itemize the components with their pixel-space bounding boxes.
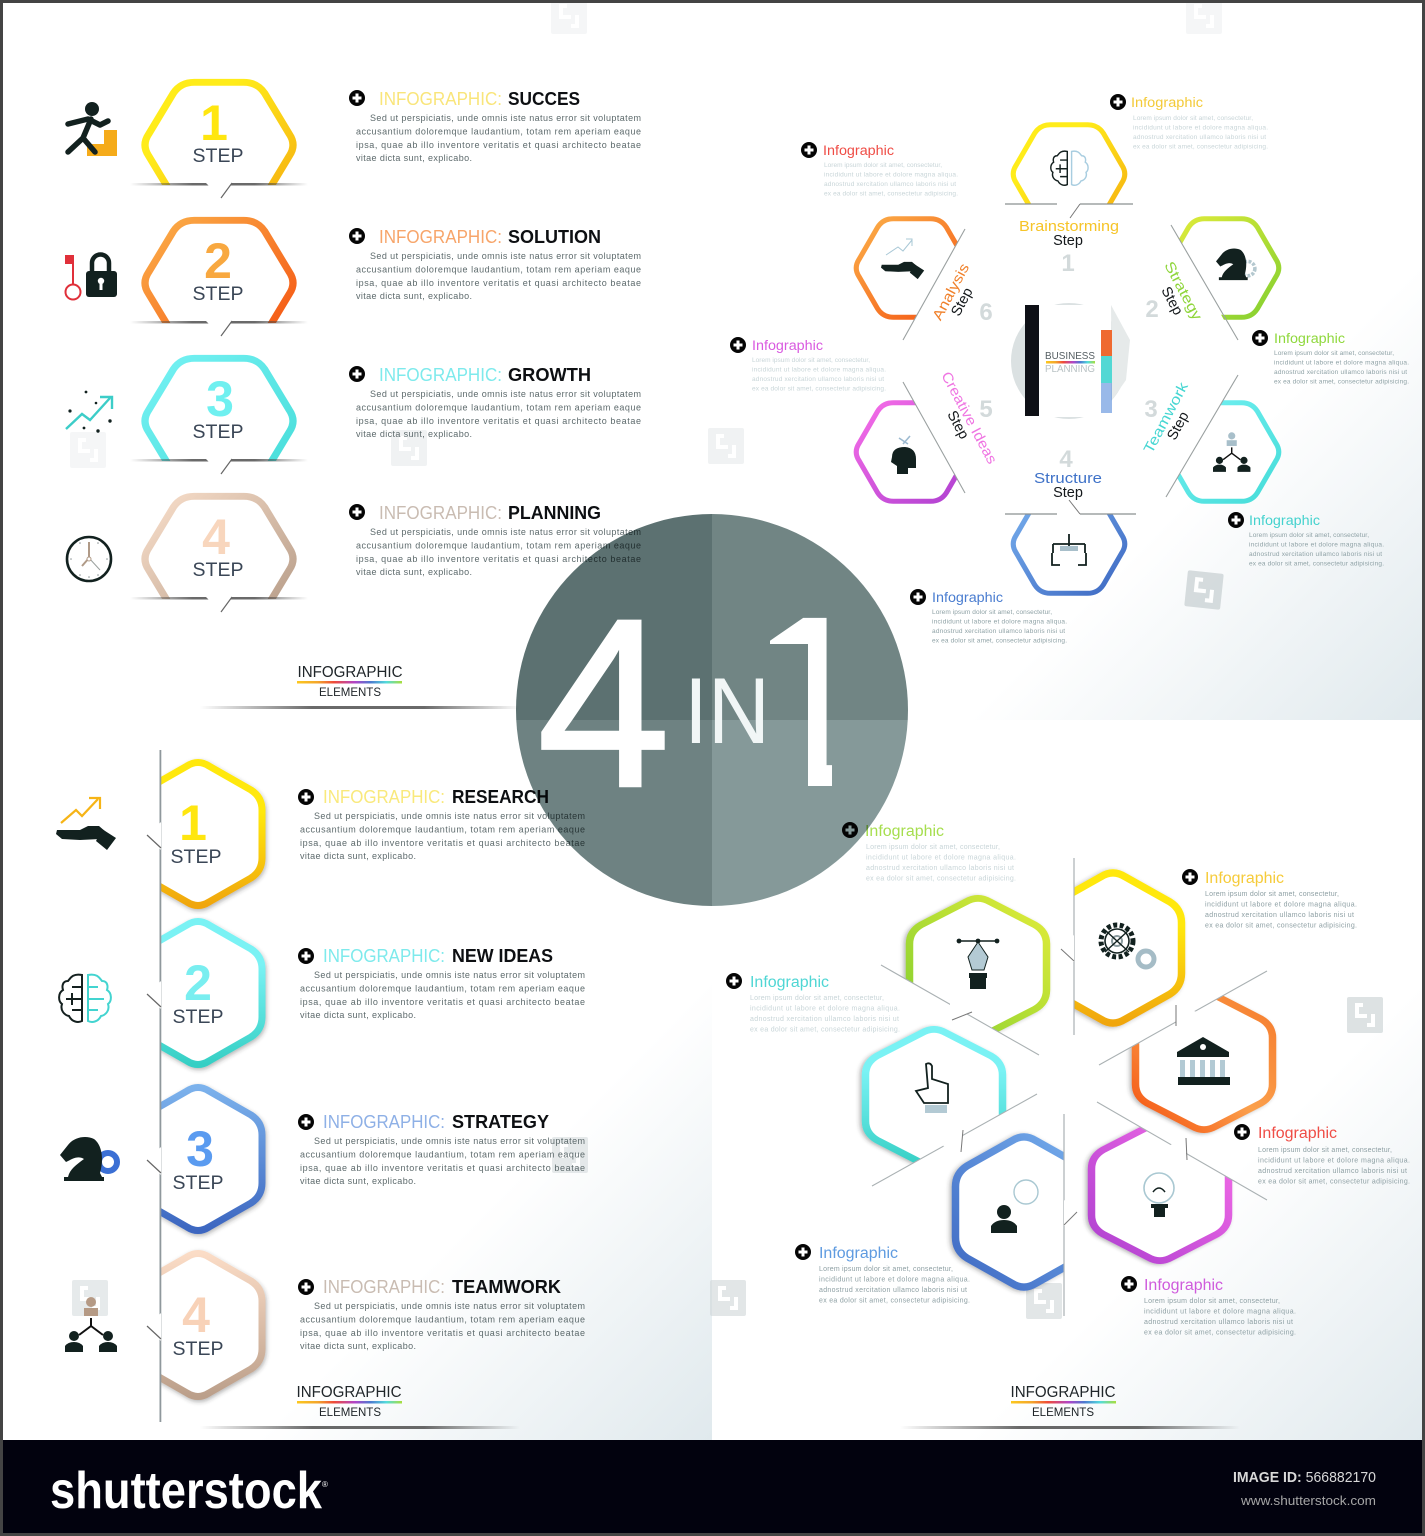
step 2 solution xyxy=(130,220,310,353)
callout: magenta: incididunt ut labore et dolore magna aliqua. xyxy=(752,366,886,374)
callout: blue xyxy=(795,1244,970,1304)
callout: green: Infographic xyxy=(1274,331,1345,346)
callout: blue: Infographic xyxy=(932,590,1003,605)
text block: growth: vitae dicta sunt, explicabo. xyxy=(356,429,472,439)
text block: strategy: vitae dicta sunt, explicabo. xyxy=(300,1176,416,1186)
callout: yellow: incididunt ut labore et dolore magna aliqua. xyxy=(1205,902,1357,908)
hexagon: teamwork xyxy=(1167,403,1279,501)
text block: growth: accusantium doloremque laudantium, totam rem aperiam eaque xyxy=(356,402,641,412)
text block: research: ipsa, quae ab illo inventore veritatis et quasi architecto beatae xyxy=(300,838,585,848)
callout: red: incididunt ut labore et dolore magna aliqua. xyxy=(824,172,958,178)
text block: research: INFOGRAPHIC: xyxy=(323,787,445,807)
icon: team hierarchy xyxy=(1213,432,1250,472)
text block: strategy: STRATEGY xyxy=(452,1112,549,1132)
callout: blue: incididunt ut labore et dolore magna aliqua. xyxy=(819,1276,970,1284)
hexagon: strategy xyxy=(1167,219,1279,317)
callout: blue: incididunt ut labore et dolore magna aliqua. xyxy=(932,618,1067,626)
label: brainstorming step: Step xyxy=(1053,233,1083,249)
step 3 growth: 3 xyxy=(206,371,234,427)
label: brainstorming step: 1 xyxy=(1061,250,1075,277)
callout: cyan: adnostrud xercitation ullamco laboris nisi ut xyxy=(1249,551,1382,558)
callout: cyan: ex ea dolor sit amet, consectetur adipisicing. xyxy=(1249,560,1384,568)
brand wordmark: shutterstock xyxy=(50,1462,322,1520)
label: creative ideas step: Step xyxy=(943,408,972,442)
center book on circle: PLANNING xyxy=(1045,363,1095,375)
hexagon: green pen xyxy=(910,898,1046,1036)
website: www.shutterstock.com xyxy=(1240,1493,1376,1508)
text block: solution: INFOGRAPHIC: xyxy=(379,227,502,247)
text block: succes: accusantium doloremque laudantium, totam rem aperiam eaque xyxy=(356,126,641,136)
callout: red: Infographic xyxy=(1258,1125,1337,1142)
label: brainstorming step: Brainstorming xyxy=(1019,219,1119,235)
callout: cyan xyxy=(726,973,900,1034)
label: structure step: Structure xyxy=(1034,471,1102,487)
callout: yellow: Infographic xyxy=(1205,870,1284,887)
step 4 planning: 4 xyxy=(202,509,230,565)
step 1 success xyxy=(130,82,310,215)
step 1 success: STEP xyxy=(193,145,243,167)
text block: solution xyxy=(349,227,641,301)
hexagon: structure xyxy=(1013,495,1125,593)
callout: yellow xyxy=(1110,94,1268,150)
callout: magenta: Lorem ipsum dolor sit amet, consectetur, xyxy=(1144,1298,1280,1305)
text block: planning: vitae dicta sunt, explicabo. xyxy=(356,567,472,577)
central 4 in 1 badge: IN xyxy=(684,658,770,763)
callout: blue: ex ea dolor sit amet, consectetur adipisicing. xyxy=(932,638,1067,644)
logo: infographic elements bottom-left: INFOGRAPHIC xyxy=(296,1384,402,1401)
callout: magenta xyxy=(730,337,886,392)
callout: blue: Infographic xyxy=(819,1245,898,1262)
callout: blue: adnostrud xercitation ullamco laboris nisi ut xyxy=(932,628,1065,635)
callout: yellow: adnostrud xercitation ullamco laboris nisi ut xyxy=(1133,134,1266,141)
text block: growth xyxy=(349,365,641,439)
callout: cyan: Infographic xyxy=(750,974,829,991)
callout: yellow: Lorem ipsum dolor sit amet, consectetur, xyxy=(1205,891,1339,898)
icon: clock xyxy=(67,537,111,581)
logo: infographic elements top-left: INFOGRAPHIC xyxy=(298,664,402,681)
text block: planning: INFOGRAPHIC: xyxy=(379,503,502,523)
text block: teamwork: ipsa, quae ab illo inventore veritatis et quasi architecto beatae xyxy=(300,1328,585,1338)
logo: infographic elements top-left: ELEMENTS xyxy=(319,685,381,699)
text block: strategy: ipsa, quae ab illo inventore veritatis et quasi architecto beatae xyxy=(300,1163,585,1173)
step 2 solution: STEP xyxy=(193,283,243,305)
text block: new ideas: vitae dicta sunt, explicabo. xyxy=(300,1010,416,1020)
text block: research: accusantium doloremque laudantium, totam rem aperiam eaque xyxy=(300,824,585,834)
label: structure step: 4 xyxy=(1059,446,1073,473)
label: teamwork step: Step xyxy=(1164,409,1193,443)
logo: infographic elements bottom-left: ELEMENTS xyxy=(319,1405,381,1419)
text block: strategy: Sed ut perspiciatis, unde omnis iste natus error sit voluptatem xyxy=(314,1136,585,1146)
text block: research xyxy=(298,787,585,861)
icon: light bulb xyxy=(1144,1173,1174,1217)
callout: green xyxy=(842,822,1016,882)
text block: planning: Sed ut perspiciatis, unde omnis iste natus error sit voluptatem xyxy=(370,527,641,537)
hexagon: orange bank xyxy=(1136,992,1272,1130)
icon: brain xyxy=(1051,151,1088,185)
fold lines and pointers xyxy=(872,858,1267,1316)
step 1 label: 1 xyxy=(179,795,207,851)
label: strategy step: 2 xyxy=(1145,296,1159,323)
icon: team hierarchy xyxy=(65,1297,117,1352)
panel: bottom-left vertical steps xyxy=(56,750,585,1430)
callout: yellow: ex ea dolor sit amet, consectetur adipisicing. xyxy=(1133,144,1268,150)
callout: yellow: ex ea dolor sit amet, consectetur adipisicing. xyxy=(1205,922,1357,930)
label: structure step xyxy=(1034,446,1102,501)
text block: new ideas xyxy=(298,946,585,1020)
text block: succes: INFOGRAPHIC: xyxy=(379,89,502,109)
hexagon: yellow gear xyxy=(1074,868,1186,1030)
callout: blue xyxy=(910,589,1067,644)
text block: growth: Sed ut perspiciatis, unde omnis iste natus error sit voluptatem xyxy=(370,389,641,399)
callout: magenta: ex ea dolor sit amet, consectetur adipisicing. xyxy=(752,386,886,392)
callout: green: adnostrud xercitation ullamco laboris nisi ut xyxy=(866,865,1014,872)
label: analysis step xyxy=(930,261,993,326)
image id: IMAGE ID: 566882170 xyxy=(1233,1469,1376,1486)
icon: bank xyxy=(1177,1037,1230,1085)
text block: succes xyxy=(349,89,641,163)
bottom banner xyxy=(3,1440,1425,1533)
text block: solution: accusantium doloremque laudantium, totam rem aperiam eaque xyxy=(356,264,641,274)
text block: strategy xyxy=(298,1112,585,1186)
step 2 label: 2 xyxy=(184,955,212,1011)
icon: person with speech bubble xyxy=(991,1180,1038,1233)
label: analysis step: 6 xyxy=(979,299,993,326)
callout: blue: ex ea dolor sit amet, consectetur adipisicing. xyxy=(819,1298,970,1304)
callout: red xyxy=(1234,1124,1410,1186)
callout: blue: Lorem ipsum dolor sit amet, consectetur, xyxy=(932,609,1052,616)
step 3 label: STEP xyxy=(173,1172,223,1194)
text block: teamwork xyxy=(298,1277,585,1351)
text block: strategy: INFOGRAPHIC: xyxy=(323,1112,445,1132)
text block: succes: ipsa, quae ab illo inventore veritatis et quasi architecto beatae xyxy=(356,140,641,150)
callout: cyan: ex ea dolor sit amet, consectetur adipisicing. xyxy=(750,1026,900,1034)
hexagon: cyan pointer xyxy=(866,1029,1002,1167)
central 4 in 1 badge: 4 xyxy=(537,569,670,837)
hexagon: brainstorming xyxy=(1013,125,1125,223)
icon: runner on stairs xyxy=(68,102,117,156)
panel: top-right radial diagram xyxy=(730,94,1409,644)
icon: head with sparks xyxy=(891,436,916,474)
step 1 label xyxy=(171,795,221,868)
callout: cyan: Infographic xyxy=(1249,513,1320,528)
text block: planning: PLANNING xyxy=(508,503,601,523)
callout: cyan: Lorem ipsum dolor sit amet, consectetur, xyxy=(750,995,884,1002)
callout: cyan: Lorem ipsum dolor sit amet, consectetur, xyxy=(1249,532,1369,539)
text block: new ideas: ipsa, quae ab illo inventore veritatis et quasi architecto beatae xyxy=(300,997,585,1007)
text block: new ideas: accusantium doloremque laudantium, totam rem aperiam eaque xyxy=(300,984,585,994)
callout: yellow: Lorem ipsum dolor sit amet, consectetur, xyxy=(1133,115,1253,122)
logo: infographic elements bottom-right: INFOGRAPHIC xyxy=(1010,1384,1116,1401)
step 3 label: 3 xyxy=(186,1121,214,1177)
icon: key and padlock xyxy=(65,254,117,300)
callout: magenta: ex ea dolor sit amet, consectetur adipisicing. xyxy=(1144,1330,1296,1336)
callout: magenta: adnostrud xercitation ullamco laboris nisi ut xyxy=(752,376,884,383)
text block: planning: ipsa, quae ab illo inventore veritatis et quasi architecto beatae xyxy=(356,554,641,564)
text block: strategy: accusantium doloremque laudantium, totam rem aperiam eaque xyxy=(300,1150,585,1160)
label: analysis step: Step xyxy=(948,285,977,319)
callout: green: incididunt ut labore et dolore magna aliqua. xyxy=(1274,360,1409,366)
hexagon: creative ideas xyxy=(856,403,968,501)
step 4 planning xyxy=(130,496,310,629)
text block: teamwork: vitae dicta sunt, explicabo. xyxy=(300,1341,416,1351)
watermark squares xyxy=(70,0,1383,1319)
step 4 label: STEP xyxy=(173,1338,223,1360)
callout: magenta: Infographic xyxy=(1144,1277,1223,1294)
callout: green: Lorem ipsum dolor sit amet, consectetur, xyxy=(1274,350,1394,357)
registered mark: ® xyxy=(322,1480,328,1489)
text block: new ideas: INFOGRAPHIC: xyxy=(323,946,445,966)
text block: teamwork: INFOGRAPHIC: xyxy=(323,1277,445,1297)
central white hexagon panel xyxy=(903,204,1238,514)
step 3 label xyxy=(173,1121,223,1194)
callout: magenta: incididunt ut labore et dolore magna aliqua. xyxy=(1144,1308,1296,1316)
callout: green xyxy=(1252,330,1409,386)
center book on circle: BUSINESS xyxy=(1045,350,1095,362)
callout: green: Infographic xyxy=(865,823,944,840)
step 2 label: STEP xyxy=(173,1006,223,1028)
text block: teamwork: Sed ut perspiciatis, unde omnis iste natus error sit voluptatem xyxy=(314,1301,585,1311)
logo: infographic elements bottom-right xyxy=(900,1384,1240,1429)
text block: research: Sed ut perspiciatis, unde omnis iste natus error sit voluptatem xyxy=(314,811,585,821)
step 1 success: 1 xyxy=(200,95,228,151)
logo: infographic elements bottom-right: ELEMENTS xyxy=(1032,1405,1094,1419)
central 4 in 1 badge xyxy=(510,510,914,910)
callout: red: ex ea dolor sit amet, consectetur adipisicing. xyxy=(824,190,958,198)
text block: succes: Sed ut perspiciatis, unde omnis iste natus error sit voluptatem xyxy=(370,113,641,123)
text block: solution: vitae dicta sunt, explicabo. xyxy=(356,291,472,301)
callout: cyan: adnostrud xercitation ullamco laboris nisi ut xyxy=(750,1016,899,1023)
icon: growth chart arrow xyxy=(66,391,112,433)
callout: blue: adnostrud xercitation ullamco laboris nisi ut xyxy=(819,1287,967,1294)
callout: red xyxy=(801,142,958,198)
logo: infographic elements bottom-left xyxy=(200,1384,520,1429)
icon: hand with chart xyxy=(881,239,924,279)
callout: green: incididunt ut labore et dolore magna aliqua. xyxy=(866,854,1016,862)
text block: teamwork: TEAMWORK xyxy=(452,1277,561,1297)
label: structure step: Step xyxy=(1053,485,1083,501)
logo: infographic elements top-left xyxy=(200,664,520,709)
text block: new ideas: Sed ut perspiciatis, unde omnis iste natus error sit voluptatem xyxy=(314,970,585,980)
text block: growth: ipsa, quae ab illo inventore veritatis et quasi architecto beatae xyxy=(356,416,641,426)
text block: research: vitae dicta sunt, explicabo. xyxy=(300,851,416,861)
step 4 label xyxy=(173,1287,223,1360)
text block: planning xyxy=(349,503,641,577)
icon: pen nib xyxy=(957,939,999,989)
text block: growth: INFOGRAPHIC: xyxy=(379,365,502,385)
text block: teamwork: accusantium doloremque laudantium, totam rem aperiam eaque xyxy=(300,1314,585,1324)
callout: red: Infographic xyxy=(823,143,894,158)
label: analysis step: Analysis xyxy=(930,261,973,323)
callout: cyan xyxy=(1228,512,1384,568)
step 3 growth: STEP xyxy=(193,421,243,443)
callout: cyan: incididunt ut labore et dolore magna aliqua. xyxy=(750,1006,900,1012)
callout: blue: Lorem ipsum dolor sit amet, consectetur, xyxy=(819,1266,953,1273)
text block: research: RESEARCH xyxy=(452,787,549,807)
callout: red: adnostrud xercitation ullamco laboris nisi ut xyxy=(824,181,956,188)
callout: red: ex ea dolor sit amet, consectetur adipisicing. xyxy=(1258,1178,1410,1186)
label: teamwork step: 3 xyxy=(1144,396,1158,423)
text block: solution: SOLUTION xyxy=(508,227,601,247)
hexagon: analysis xyxy=(856,219,968,317)
icon: structure chart xyxy=(1052,534,1086,565)
center book on circle xyxy=(1011,303,1130,419)
label: creative ideas step: 5 xyxy=(979,396,993,423)
callout: yellow: incididunt ut labore et dolore magna aliqua. xyxy=(1133,124,1268,132)
icon: pointing hand xyxy=(916,1063,948,1113)
callout: green: ex ea dolor sit amet, consectetur adipisicing. xyxy=(866,876,1016,882)
callout: magenta: Lorem ipsum dolor sit amet, consectetur, xyxy=(752,357,870,364)
hexagon: magenta bulb xyxy=(1092,1123,1228,1261)
step 1 label: STEP xyxy=(171,846,221,868)
label: strategy step xyxy=(1145,259,1205,324)
icon: knight with gear xyxy=(1216,248,1255,280)
panel: bottom-right petal diagram xyxy=(726,822,1410,1429)
step 2 solution: 2 xyxy=(204,233,232,289)
callout: red: incididunt ut labore et dolore magna aliqua. xyxy=(1258,1158,1410,1164)
step 2 label xyxy=(173,955,223,1028)
callout: cyan: incididunt ut labore et dolore magna aliqua. xyxy=(1249,542,1384,548)
callout: green: Lorem ipsum dolor sit amet, consectetur, xyxy=(866,844,1000,851)
hexagon: blue person xyxy=(956,1137,1092,1287)
callout: magenta: Infographic xyxy=(752,338,823,353)
text block: new ideas: NEW IDEAS xyxy=(452,946,553,966)
callout: magenta: adnostrud xercitation ullamco laboris nisi ut xyxy=(1144,1319,1293,1326)
callout: yellow: Infographic xyxy=(1131,95,1203,110)
text block: succes: vitae dicta sunt, explicabo. xyxy=(356,153,472,163)
callout: green: adnostrud xercitation ullamco laboris nisi ut xyxy=(1274,369,1407,376)
callout: green: ex ea dolor sit amet, consectetur adipisicing. xyxy=(1274,378,1409,386)
label: strategy step: Step xyxy=(1157,284,1186,318)
central 4 in 1 badge: 1 xyxy=(742,569,875,837)
icon: gears xyxy=(1101,925,1154,967)
callout: red: adnostrud xercitation ullamco laboris nisi ut xyxy=(1258,1168,1407,1175)
text block: planning: accusantium doloremque laudantium, totam rem aperiam eaque xyxy=(356,540,641,550)
callout: red: Lorem ipsum dolor sit amet, consectetur, xyxy=(1258,1147,1392,1154)
icon: brain xyxy=(59,975,111,1022)
label: teamwork step: Teamwork xyxy=(1141,379,1192,456)
icon: knight with gear xyxy=(60,1137,117,1181)
hexagon row xyxy=(134,762,262,1396)
icon: hand with growth chart xyxy=(56,798,116,850)
vertical divider with pointers xyxy=(122,750,161,1430)
text block: growth: GROWTH xyxy=(508,365,591,385)
callout: yellow xyxy=(1182,869,1357,930)
label: strategy step: Strategy xyxy=(1160,259,1205,324)
step 4 label: 4 xyxy=(182,1287,210,1343)
label: creative ideas step: Creative Ideas xyxy=(938,369,1000,467)
callout: red: Lorem ipsum dolor sit amet, consectetur, xyxy=(824,162,942,169)
panel: top-left four steps xyxy=(65,82,641,709)
step 4 planning: STEP xyxy=(193,559,243,581)
callout: yellow: adnostrud xercitation ullamco laboris nisi ut xyxy=(1205,912,1354,919)
label: brainstorming step xyxy=(1019,219,1119,277)
text block: solution: ipsa, quae ab illo inventore veritatis et quasi architecto beatae xyxy=(356,278,641,288)
text block: succes: SUCCES xyxy=(508,89,580,109)
text block: solution: Sed ut perspiciatis, unde omnis iste natus error sit voluptatem xyxy=(370,251,641,261)
callout: magenta xyxy=(1121,1276,1296,1336)
step 3 growth xyxy=(130,358,310,491)
